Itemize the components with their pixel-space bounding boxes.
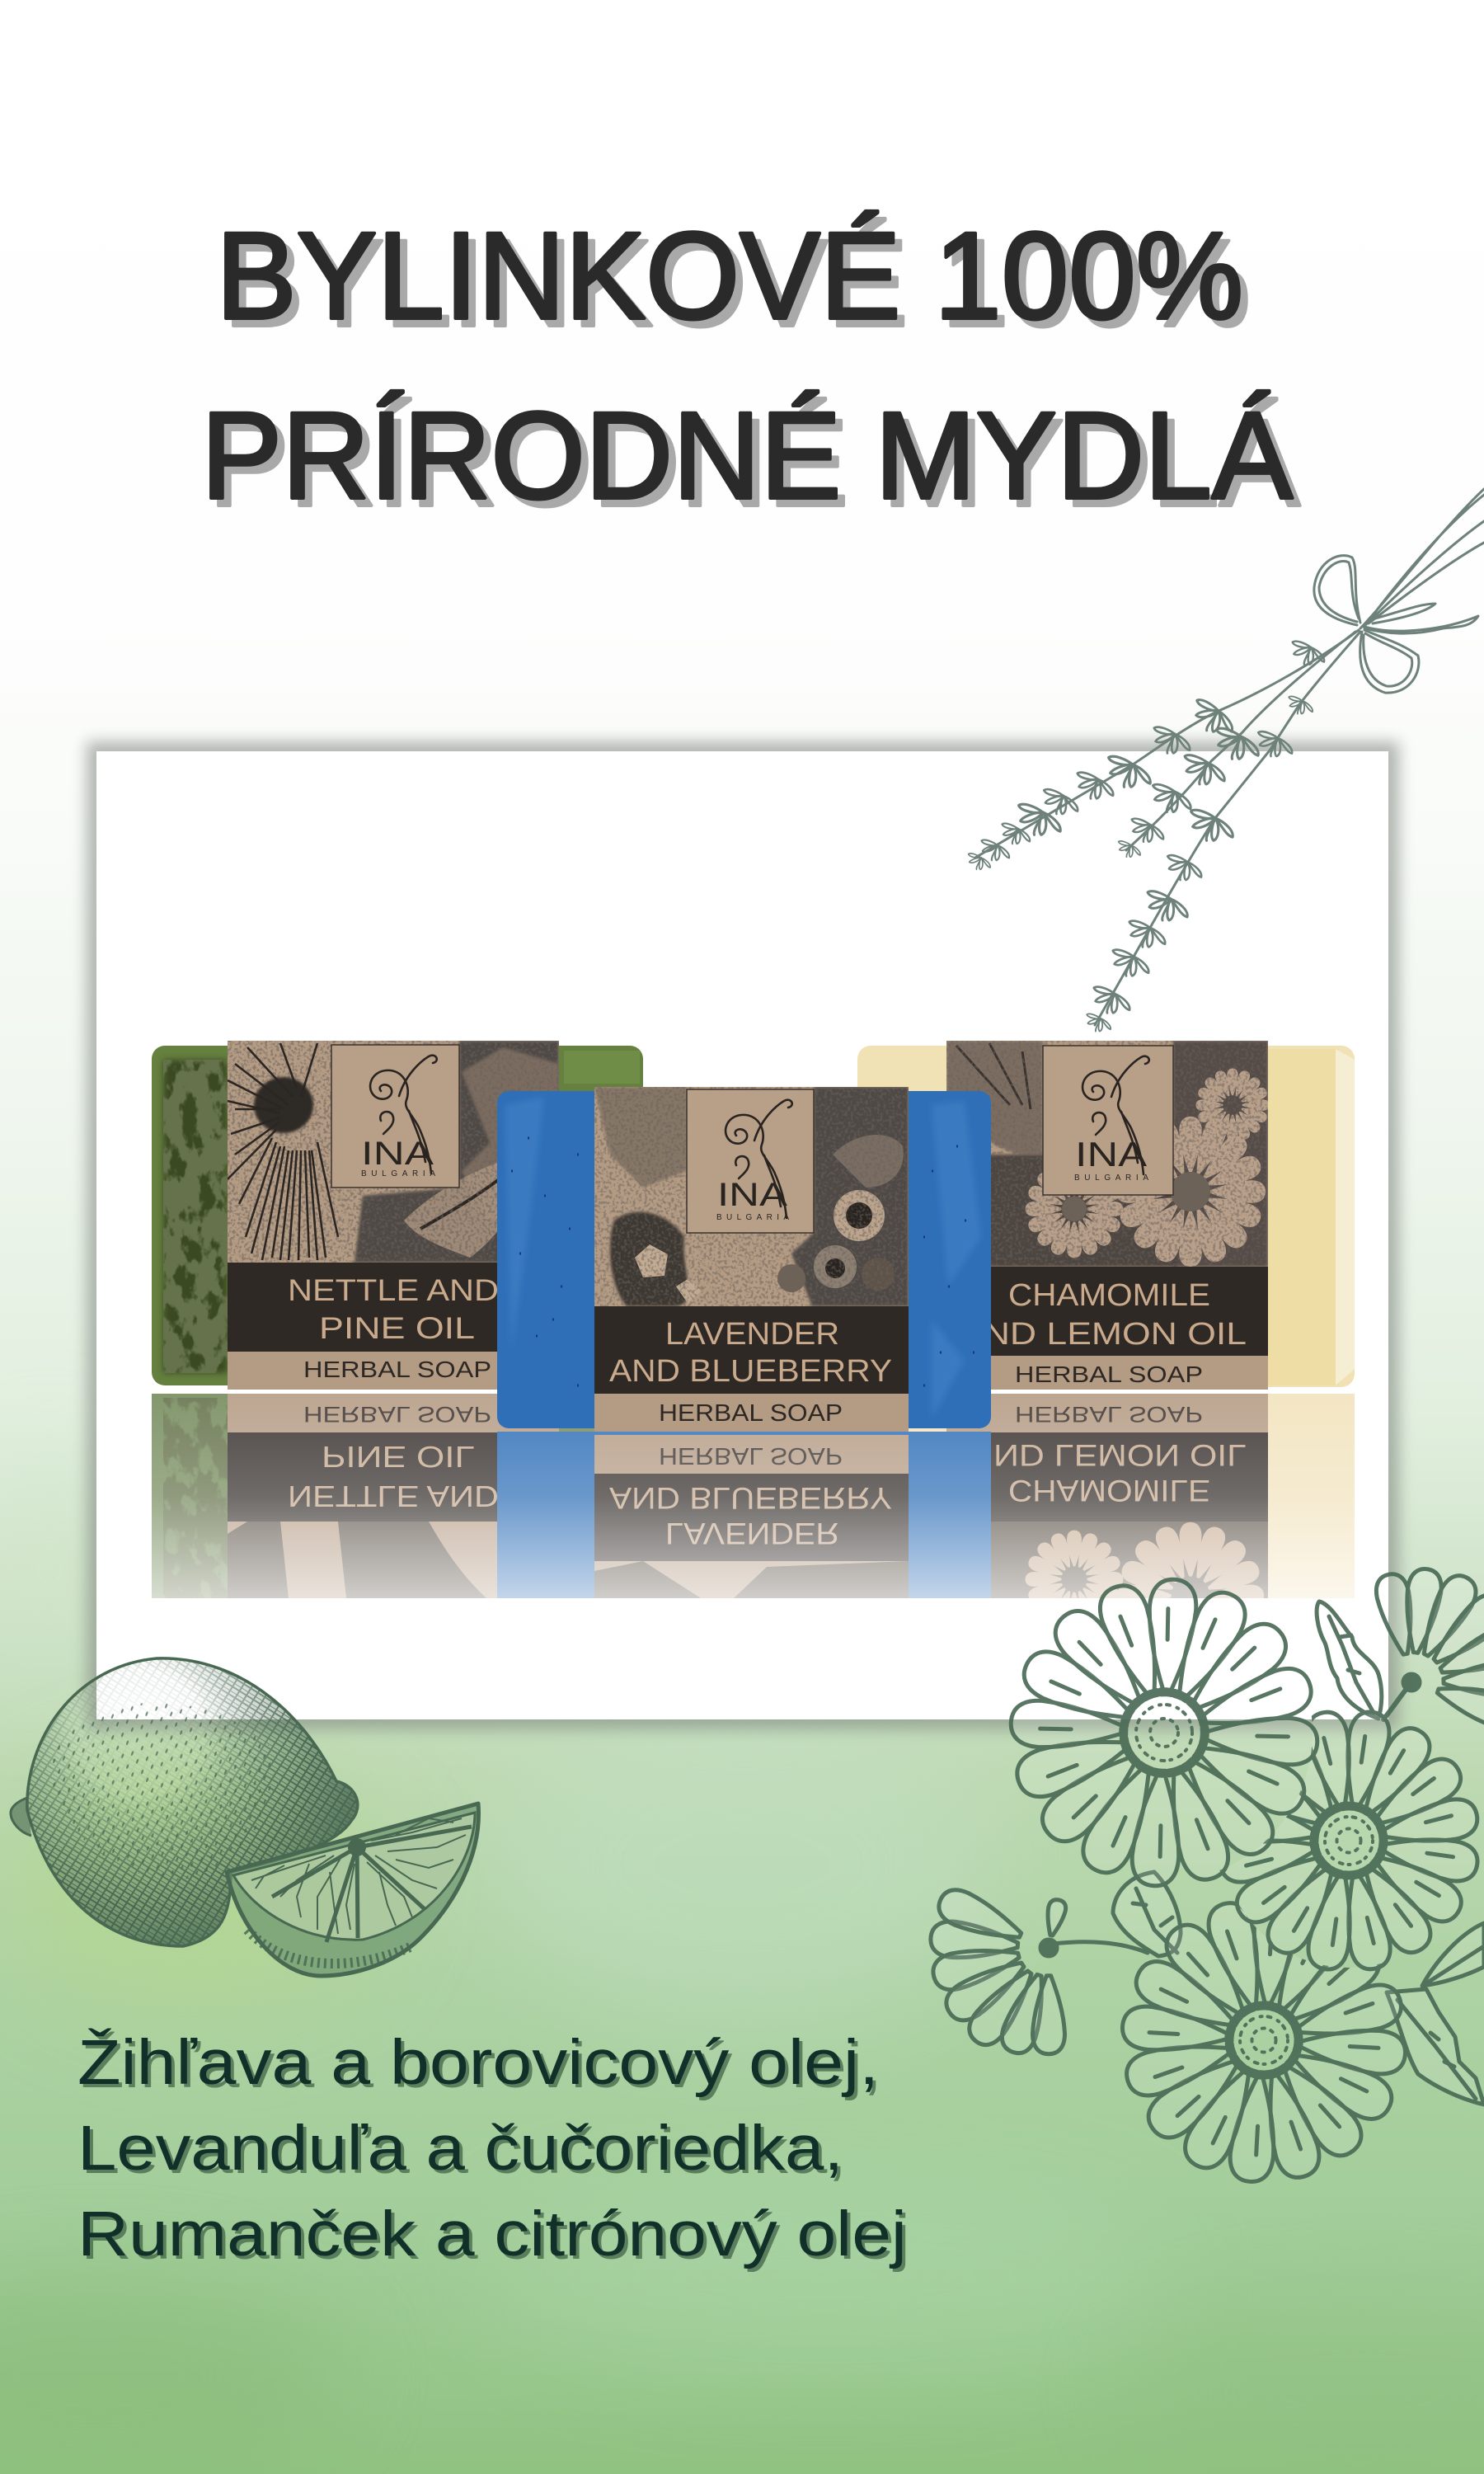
icon: stems and leaves xyxy=(1054,1602,1484,2105)
photo: soap reflection: AND BLUEBERRY xyxy=(609,1481,892,1515)
photo: nettle and pine wrapper: NETTLE AND xyxy=(288,1273,499,1307)
icon: chamomile flowers xyxy=(929,1567,1484,2196)
panel: product photo card xyxy=(87,741,1399,1729)
photo: chamomile and lemon wrapper xyxy=(946,1041,1270,1390)
photo: nettle and pine wrapper: HERBAL SOAP xyxy=(303,1357,491,1382)
photo: soap reflection: NETTLE AND xyxy=(288,1479,499,1513)
photo: lavender and blueberry wrapper: INA xyxy=(717,1177,787,1213)
text: soap variants list: Žihľava a borovicový olej, xyxy=(77,2027,879,2098)
photo: nettle and pine wrapper: BULGARIA xyxy=(361,1169,435,1178)
icon: bud, upper right xyxy=(1373,1567,1484,1730)
photo: soap reflection xyxy=(152,1394,1355,1598)
photo: chamomile and lemon wrapper: INA xyxy=(1075,1135,1147,1174)
photo: soap reflection: CHAMOMILE xyxy=(1008,1474,1210,1507)
photo: nettle and pine wrapper: PINE OIL xyxy=(319,1311,475,1345)
photo: chamomile and lemon wrapper: BULGARIA xyxy=(1074,1174,1148,1183)
icon: right flower xyxy=(1220,1710,1479,1971)
photo: soap reflection: LAVENDER xyxy=(665,1517,839,1550)
icon: top flower xyxy=(1000,1569,1328,1897)
text: soap variants list: Levanduľa a čučoriedka, xyxy=(77,2113,843,2184)
photo: yellow chamomile and lemon soap xyxy=(857,1046,1355,1387)
text: soap variants list: Rumanček a citrónový olej xyxy=(77,2199,907,2269)
icon: lower flower xyxy=(1120,1901,1407,2184)
photo: lavender and blueberry wrapper: LAVENDER xyxy=(665,1317,839,1352)
photo: chamomile and lemon wrapper: HERBAL SOAP xyxy=(1015,1362,1203,1387)
icon: lemon with slice xyxy=(11,1658,478,1976)
icon: bud, lower left xyxy=(929,1884,1068,2058)
photo: nettle and pine wrapper xyxy=(228,1041,559,1390)
text: soap variants list xyxy=(77,2027,907,2269)
photo: soap reflection: HERBAL SOAP xyxy=(1015,1402,1203,1427)
title: BYLINKOVÉ 100% xyxy=(216,206,1243,345)
photo: soap reflection: PINE OIL xyxy=(322,1440,475,1474)
photo: nettle and pine wrapper: INA xyxy=(361,1136,434,1172)
photo: blue lavender and blueberry soap xyxy=(497,1091,991,1428)
photo: lavender and blueberry wrapper: HERBAL SOAP xyxy=(659,1400,843,1427)
title: PRÍRODNÉ MYDLÁ xyxy=(201,386,1293,524)
photo: chamomile and lemon wrapper: CHAMOMILE xyxy=(1008,1278,1210,1313)
photo: lavender and blueberry wrapper xyxy=(594,1087,909,1432)
photo: soap reflection: HERBAL SOAP xyxy=(659,1442,843,1469)
photo: chamomile and lemon wrapper: AND LEMON OIL xyxy=(959,1317,1247,1352)
photo: lavender and blueberry wrapper: AND BLUEBERRY xyxy=(609,1354,892,1389)
photo: green nettle and pine soap xyxy=(152,1046,643,1385)
photo: lavender and blueberry wrapper: BULGARIA xyxy=(716,1213,789,1222)
title xyxy=(201,206,1293,524)
icon: lavender sprigs tied with a bow xyxy=(969,489,1484,1032)
photo: soap reflection: HERBAL SOAP xyxy=(303,1402,491,1427)
photo: soap reflection: ND LEMON OIL xyxy=(993,1438,1247,1472)
